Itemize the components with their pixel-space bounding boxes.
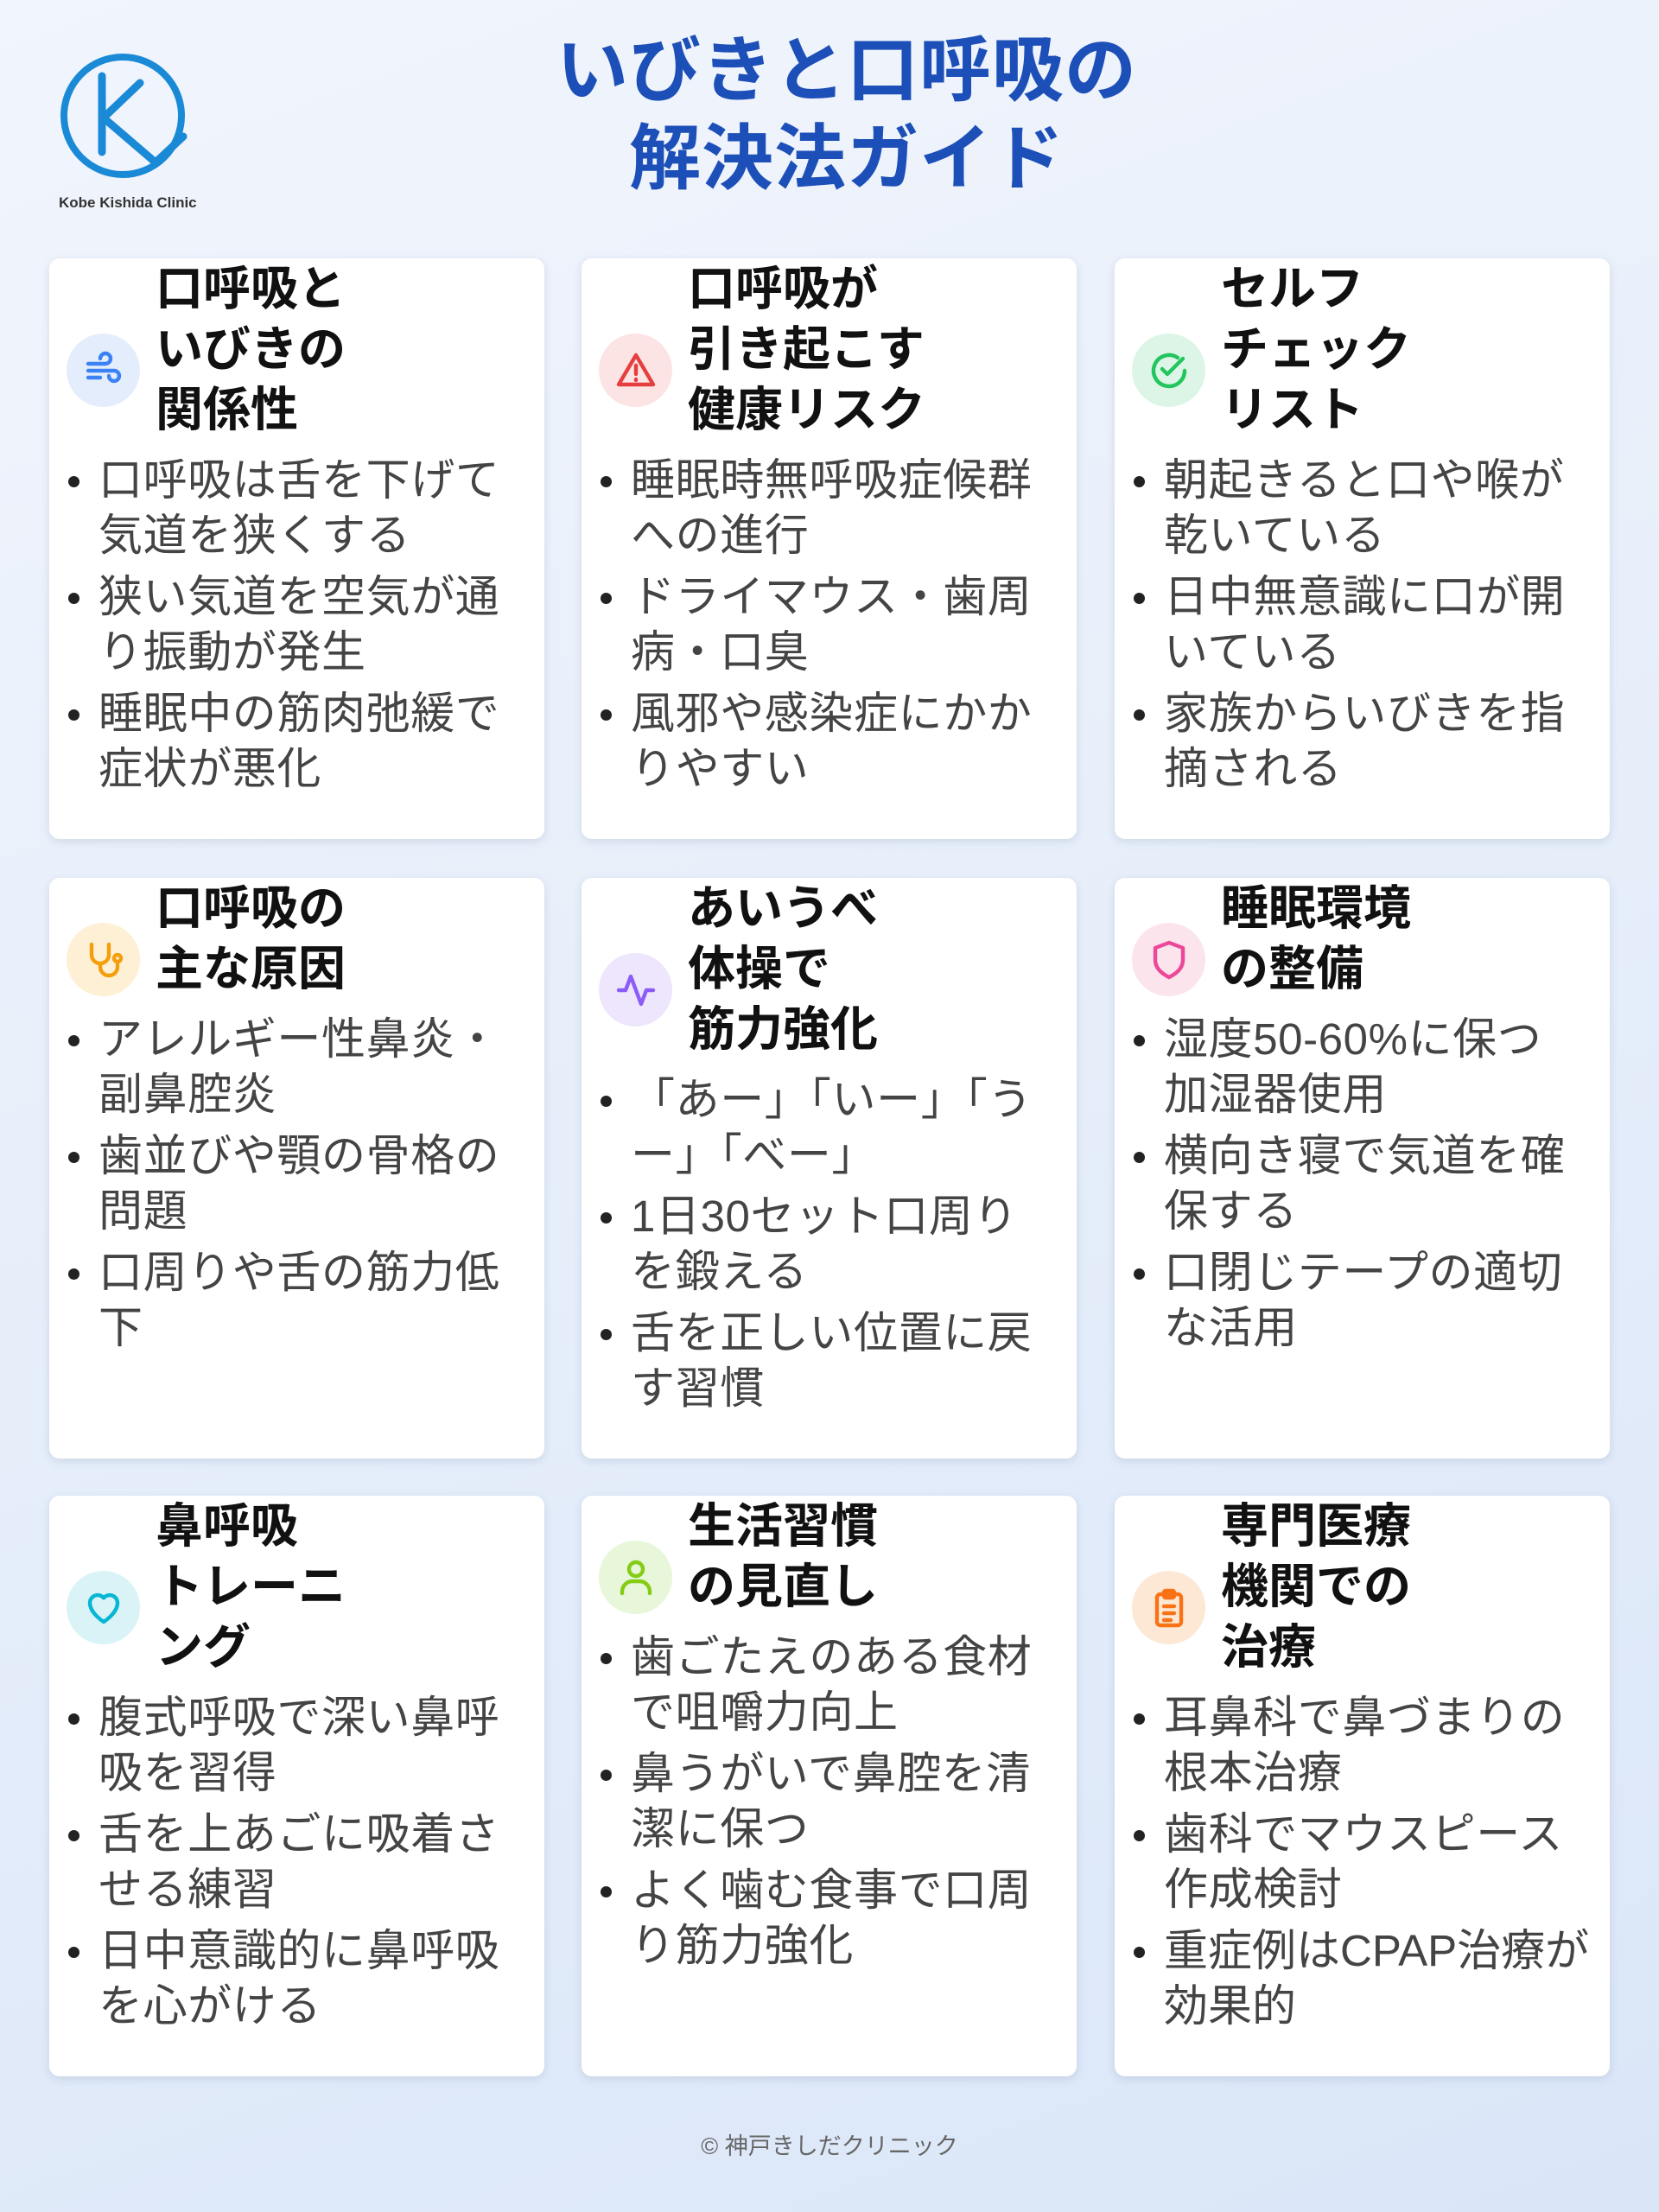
heading: の見直し	[688, 1560, 878, 1613]
panel: self check	[1115, 258, 1610, 839]
panel: relation	[49, 258, 544, 839]
bullets: 睡眠中の筋肉弛緩で症状が悪化	[99, 689, 499, 793]
bullets: 舌を上あごに吸着させる練習	[99, 1809, 499, 1914]
bullets	[601, 1075, 1033, 1413]
heading	[67, 881, 346, 996]
bullets	[68, 1693, 499, 2031]
bullets: ドライマウス・歯周病・口臭	[631, 572, 1032, 677]
panel: specialist	[1115, 1496, 1610, 2076]
bullets: 耳鼻科で鼻づまりの根本治療	[1164, 1693, 1565, 1797]
title: いびきと口呼吸の	[556, 30, 1137, 111]
bullets: 舌を正しい位置に戻す習慣	[631, 1308, 1032, 1413]
heading: トレーニ	[156, 1560, 346, 1613]
bullets: 歯並びや顎の骨格の問題	[99, 1131, 499, 1236]
bullets: 歯科でマウスピース作成検討	[1164, 1809, 1563, 1914]
logo	[59, 54, 197, 211]
bullets: 効果的	[1164, 1981, 1296, 2031]
heading	[1132, 1499, 1411, 1674]
title: 解決法ガイド	[629, 118, 1065, 199]
bullets	[68, 455, 499, 793]
heading: セルフ	[1221, 262, 1363, 315]
heading: 主な原因	[156, 942, 346, 995]
logo: Kobe Kishida Clinic	[59, 194, 197, 211]
bullets: アレルギー性鼻炎・副鼻腔炎	[99, 1014, 499, 1119]
bullets: 重症例はCPAP治療が	[1164, 1926, 1589, 1975]
bullets	[1134, 455, 1565, 793]
heading: ング	[156, 1620, 251, 1674]
heading: チェック	[1221, 322, 1411, 376]
heading: 機関での	[1221, 1560, 1411, 1613]
bullets: 口呼吸は舌を下げて気道を狭くする	[99, 455, 499, 560]
heading	[599, 881, 878, 1056]
heading: リスト	[1221, 383, 1363, 436]
bullets	[68, 1014, 499, 1352]
heading	[1132, 881, 1411, 996]
panel: nasal training	[49, 1496, 544, 2076]
heading: 口呼吸が	[688, 262, 878, 315]
bullets: 湿度50-60%に保つ	[1164, 1014, 1541, 1064]
bullets: 横向き寝で気道を確保する	[1164, 1131, 1565, 1236]
bullets	[1134, 1693, 1589, 2031]
heading	[1132, 262, 1411, 436]
heading: 鼻呼吸	[156, 1499, 298, 1553]
heading: 引き起こす	[688, 322, 925, 376]
heading: 筋力強化	[688, 1002, 878, 1056]
bullets	[601, 455, 1032, 793]
bullets: 風邪や感染症にかかりやすい	[631, 689, 1032, 793]
bullets: を鍛える	[631, 1247, 808, 1296]
panel: exercise	[582, 878, 1077, 1459]
bullets: 日中無意識に口が開いている	[1164, 572, 1565, 677]
bullets: 口周りや舌の筋力低下	[99, 1248, 499, 1352]
bullets: 口閉じテープの適切な活用	[1164, 1248, 1562, 1352]
heading: 関係性	[156, 383, 298, 436]
heading	[67, 1499, 346, 1674]
heading: の整備	[1221, 942, 1363, 995]
heading: 口呼吸と	[156, 262, 346, 315]
heading: あいうべ	[688, 881, 878, 935]
bullets	[601, 1632, 1032, 1970]
heading: 体操で	[688, 942, 830, 995]
heading	[67, 262, 346, 436]
bullets: 腹式呼吸で深い鼻呼吸を習得	[99, 1693, 499, 1797]
bullets: 鼻うがいで鼻腔を清潔に保つ	[631, 1749, 1031, 1853]
heading: 睡眠環境	[1221, 881, 1411, 935]
bullets: 加湿器使用	[1164, 1070, 1387, 1119]
panel: sleep environment	[1115, 878, 1610, 1459]
bullets: 1日30セット口周り	[631, 1192, 1018, 1241]
heading	[599, 262, 925, 436]
title	[556, 30, 1137, 199]
heading	[599, 1499, 878, 1614]
footer: © 神戸きしだクリニック	[701, 2133, 958, 2159]
heading: 健康リスク	[688, 383, 925, 436]
heading: 口呼吸の	[156, 881, 346, 935]
bullets	[1134, 1014, 1565, 1352]
panel: risks	[582, 258, 1077, 839]
bullets: 睡眠時無呼吸症候群への進行	[631, 455, 1032, 560]
bullets: 「あー」「いー」「うー」「べー」	[631, 1075, 1033, 1179]
panel: lifestyle	[582, 1496, 1077, 2076]
heading: いびきの	[156, 322, 346, 376]
bullets: 家族からいびきを指摘される	[1164, 689, 1565, 793]
heading: 生活習慣	[688, 1499, 878, 1553]
bullets: 歯ごたえのある食材で咀嚼力向上	[631, 1632, 1032, 1737]
bullets: 日中意識的に鼻呼吸を心がける	[99, 1926, 499, 2031]
heading: 治療	[1221, 1620, 1316, 1674]
heading: 専門医療	[1221, 1499, 1411, 1553]
bullets: 狭い気道を空気が通り振動が発生	[99, 572, 499, 677]
panel: causes	[49, 878, 544, 1459]
bullets: よく噛む食事で口周り筋力強化	[631, 1866, 1032, 1970]
bullets: 朝起きると口や喉が乾いている	[1164, 455, 1564, 560]
